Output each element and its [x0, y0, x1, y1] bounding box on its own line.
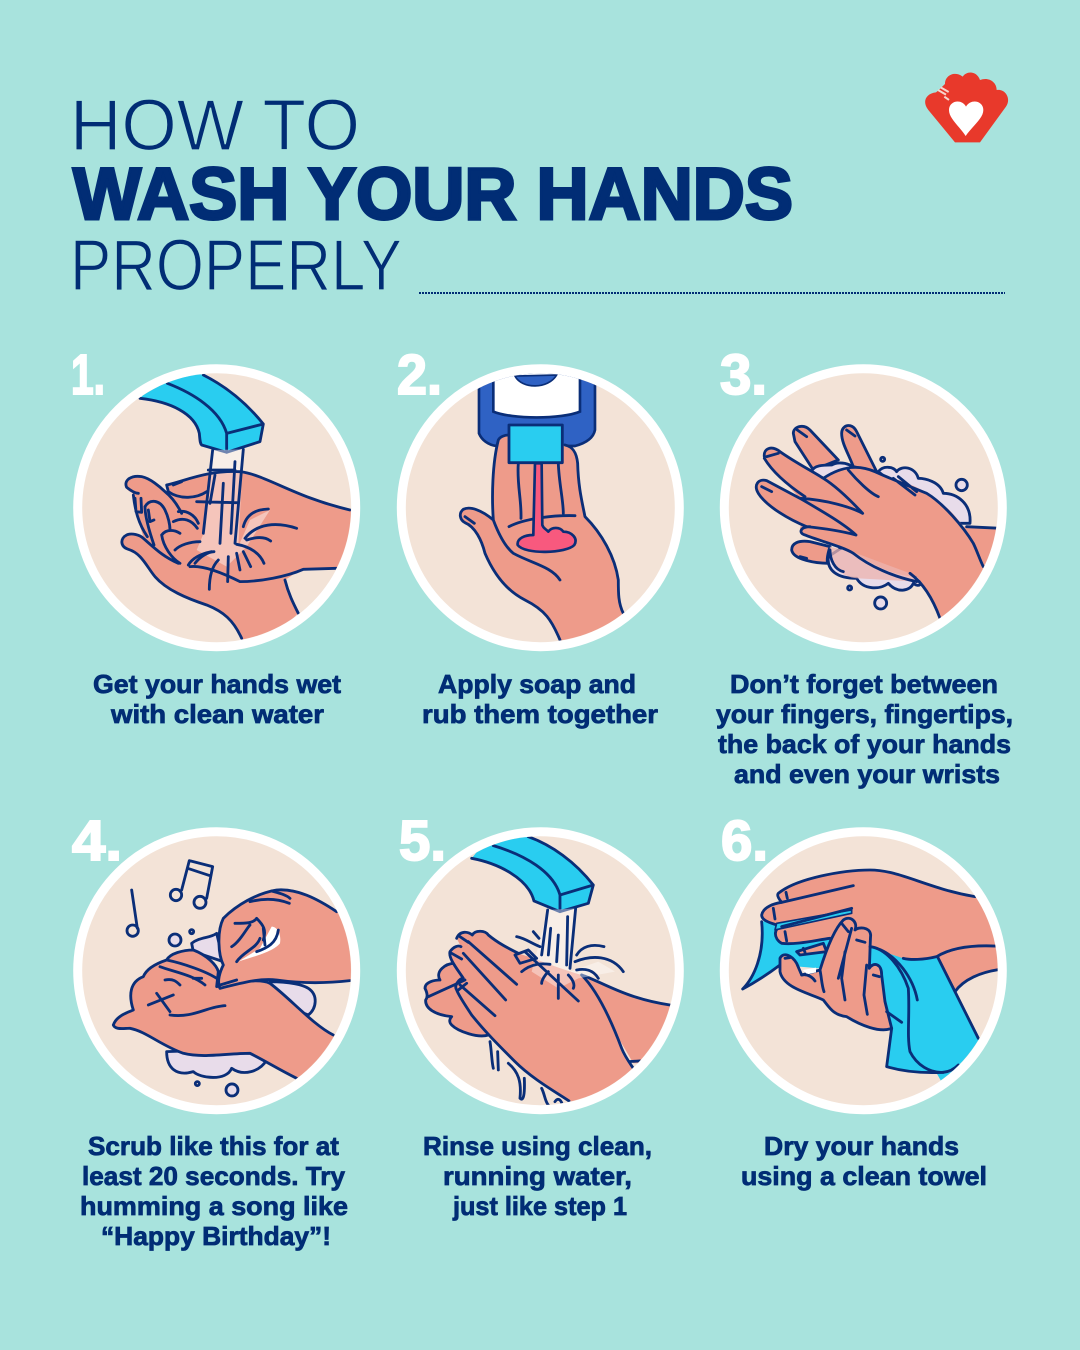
caption 3 — [716, 669, 1013, 789]
icon: rinsing hands under faucet — [425, 832, 685, 1115]
number 1: 1. — [71, 343, 105, 407]
caption 4: least 20 seconds. Try — [82, 1161, 346, 1191]
panel: step 1 — [71, 343, 356, 729]
caption 4 — [80, 1131, 348, 1251]
caption 6 — [741, 1131, 987, 1191]
icon: logo heart shell — [925, 73, 1008, 142]
circle 3 — [724, 369, 1002, 647]
caption 3: your fingers, fingertips, — [716, 699, 1013, 729]
caption 1: Get your hands wet — [93, 669, 341, 699]
caption 5: Rinse using clean, — [423, 1131, 652, 1161]
panel: step 6 — [721, 809, 1027, 1191]
circle 5 — [401, 832, 679, 1110]
icon: scrubbing between fingers — [756, 425, 1003, 637]
caption 1 — [93, 669, 341, 729]
title line: properly: PROPERLY — [70, 226, 402, 306]
circle 6 — [724, 832, 1002, 1110]
icon: faucet over cupped hands — [122, 367, 353, 650]
title line: wash your hands: WASH YOUR HANDS — [73, 154, 793, 235]
icon: scrubbing hands with music notes — [113, 861, 367, 1108]
caption 6: Dry your hands — [764, 1131, 959, 1161]
caption 4: “Happy Birthday”! — [101, 1221, 331, 1251]
circle 2 — [401, 369, 679, 647]
panel: step 5 — [399, 809, 685, 1221]
panel: step 3 — [716, 343, 1013, 789]
caption 4: Scrub like this for at — [88, 1131, 339, 1161]
caption 1: with clean water — [110, 699, 324, 729]
icon: drying hands with towel — [741, 868, 998, 1080]
caption 2 — [422, 669, 658, 729]
icon: soap dispenser and hand — [458, 373, 624, 641]
number 4: 4. — [72, 809, 122, 873]
caption 6: using a clean towel — [741, 1161, 987, 1191]
caption 4: humming a song like — [80, 1191, 348, 1221]
caption 3: and even your wrists — [734, 759, 1000, 789]
number 6: 6. — [721, 809, 768, 873]
caption 3: the back of your hands — [718, 729, 1011, 759]
circle 1 — [78, 369, 356, 647]
panel: step 4 — [72, 809, 367, 1251]
circle 4 — [78, 832, 356, 1110]
title line: how to: HOW TO — [70, 86, 360, 166]
caption 5: just like step 1 — [452, 1191, 627, 1221]
caption 5 — [423, 1131, 652, 1221]
caption 5: running water, — [443, 1161, 632, 1191]
caption 2: rub them together — [422, 699, 658, 729]
title — [70, 86, 793, 306]
panel: step 2 — [397, 343, 679, 729]
number 2: 2. — [397, 343, 442, 407]
number 5: 5. — [399, 809, 446, 873]
caption 2: Apply soap and — [438, 669, 636, 699]
caption 3: Don’t forget between — [730, 669, 998, 699]
number 3: 3. — [720, 343, 767, 407]
